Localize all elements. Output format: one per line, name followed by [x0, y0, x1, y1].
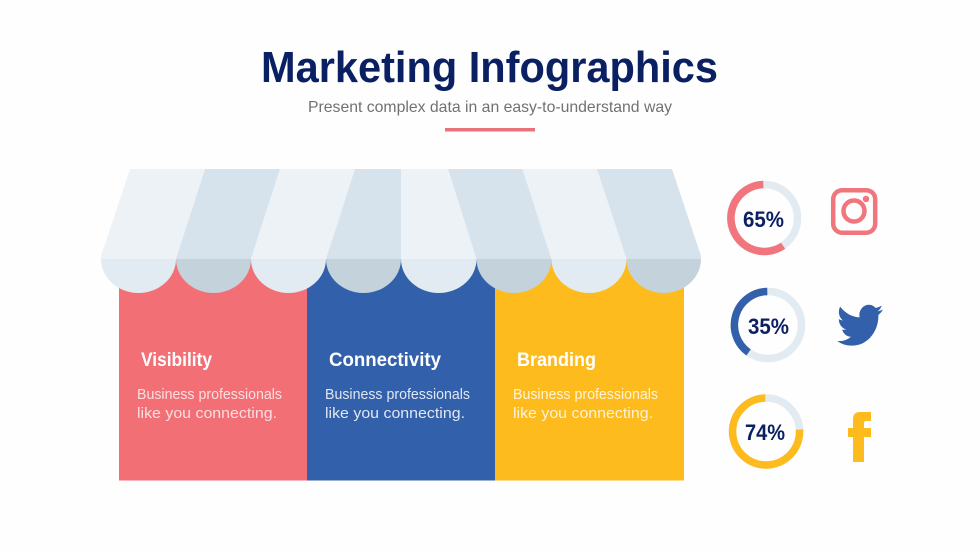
donut chart: 35% — [734, 292, 802, 358]
text: branding description: Business professionals — [513, 386, 658, 403]
donut chart: 65%: 65% — [743, 207, 784, 232]
donut chart: 65% — [730, 184, 798, 252]
subtitle: Present complex data in an easy-to-understand way — [308, 99, 672, 116]
icon: twitter bird — [837, 305, 883, 346]
icon: facebook f — [848, 412, 871, 462]
text: branding description: like you connecting. — [513, 405, 653, 422]
awning — [101, 169, 701, 293]
heading: connectivity: Connectivity — [329, 350, 441, 371]
text: visibility description — [137, 386, 282, 422]
text: branding description — [513, 386, 658, 422]
panel: connectivity — [307, 259, 495, 480]
panel: branding — [495, 259, 684, 480]
text: visibility description: Business professionals — [137, 386, 282, 403]
text: connectivity description: like you connecting. — [325, 405, 465, 422]
heading: visibility: Visibility — [141, 350, 212, 371]
text: visibility description: like you connecting. — [137, 405, 277, 422]
donut chart: 74% — [732, 398, 800, 465]
panel: visibility — [119, 259, 307, 480]
title accent bar — [445, 128, 535, 132]
text: connectivity description — [325, 386, 470, 422]
heading: branding: Branding — [517, 350, 596, 371]
donut chart: 35%: 35% — [748, 314, 789, 339]
title: Marketing Infographics — [261, 43, 718, 92]
text: connectivity description: Business professionals — [325, 386, 470, 403]
icon: instagram — [833, 190, 875, 233]
donut chart: 74%: 74% — [745, 420, 785, 445]
